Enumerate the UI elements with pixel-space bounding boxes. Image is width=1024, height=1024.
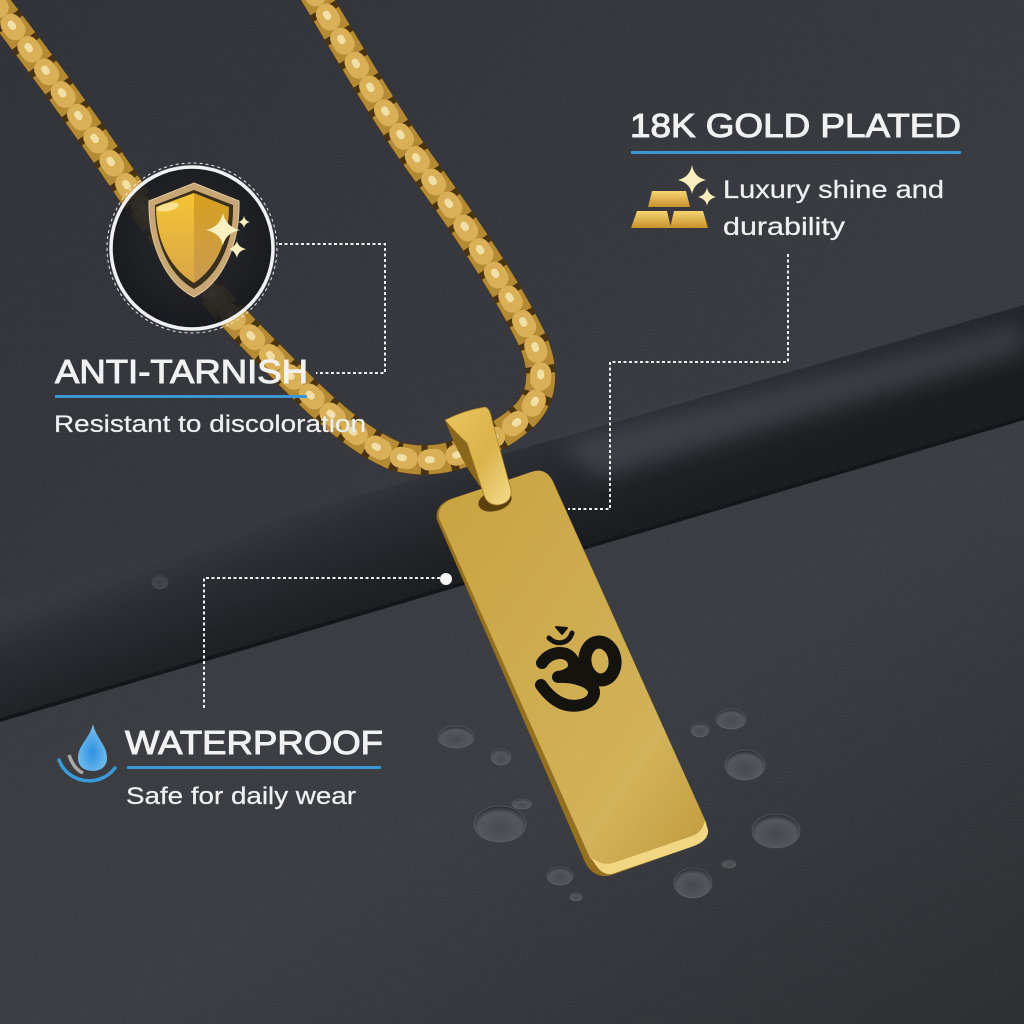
callout: 18k gold plated bbox=[568, 107, 961, 509]
connector line bbox=[204, 578, 440, 708]
pendant bail loop bbox=[445, 407, 511, 505]
underline bbox=[127, 766, 381, 769]
connector dot bbox=[440, 573, 452, 585]
heading: ANTI-TARNISH bbox=[55, 353, 308, 390]
underline bbox=[55, 395, 307, 398]
callout: anti-tarnish bbox=[54, 163, 385, 438]
description: Resistant to discoloration bbox=[54, 411, 366, 438]
om symbol bbox=[541, 627, 617, 706]
icon: gold shield bbox=[149, 183, 250, 297]
connector line bbox=[568, 254, 788, 509]
bail front bbox=[445, 407, 511, 505]
dark diagonal band bbox=[0, 305, 1024, 722]
pendant hole bbox=[476, 487, 514, 515]
underline bbox=[631, 151, 961, 154]
badge circle bbox=[107, 163, 277, 333]
description: Safe for daily wear bbox=[126, 783, 356, 810]
icon: gold bars bbox=[631, 165, 716, 228]
description: Luxury shine and bbox=[723, 176, 944, 204]
box chain necklace bbox=[0, 0, 541, 460]
heading: WATERPROOF bbox=[125, 724, 383, 761]
description line two: durability bbox=[723, 213, 846, 241]
heading: 18K GOLD PLATED bbox=[630, 107, 961, 144]
water droplets bbox=[152, 575, 800, 901]
bail back fold bbox=[445, 420, 484, 492]
sparkles bbox=[206, 213, 250, 258]
callout: waterproof bbox=[59, 573, 452, 810]
pendant tag bbox=[437, 471, 708, 876]
connector line bbox=[279, 244, 385, 373]
icon: water drop bbox=[59, 724, 115, 781]
